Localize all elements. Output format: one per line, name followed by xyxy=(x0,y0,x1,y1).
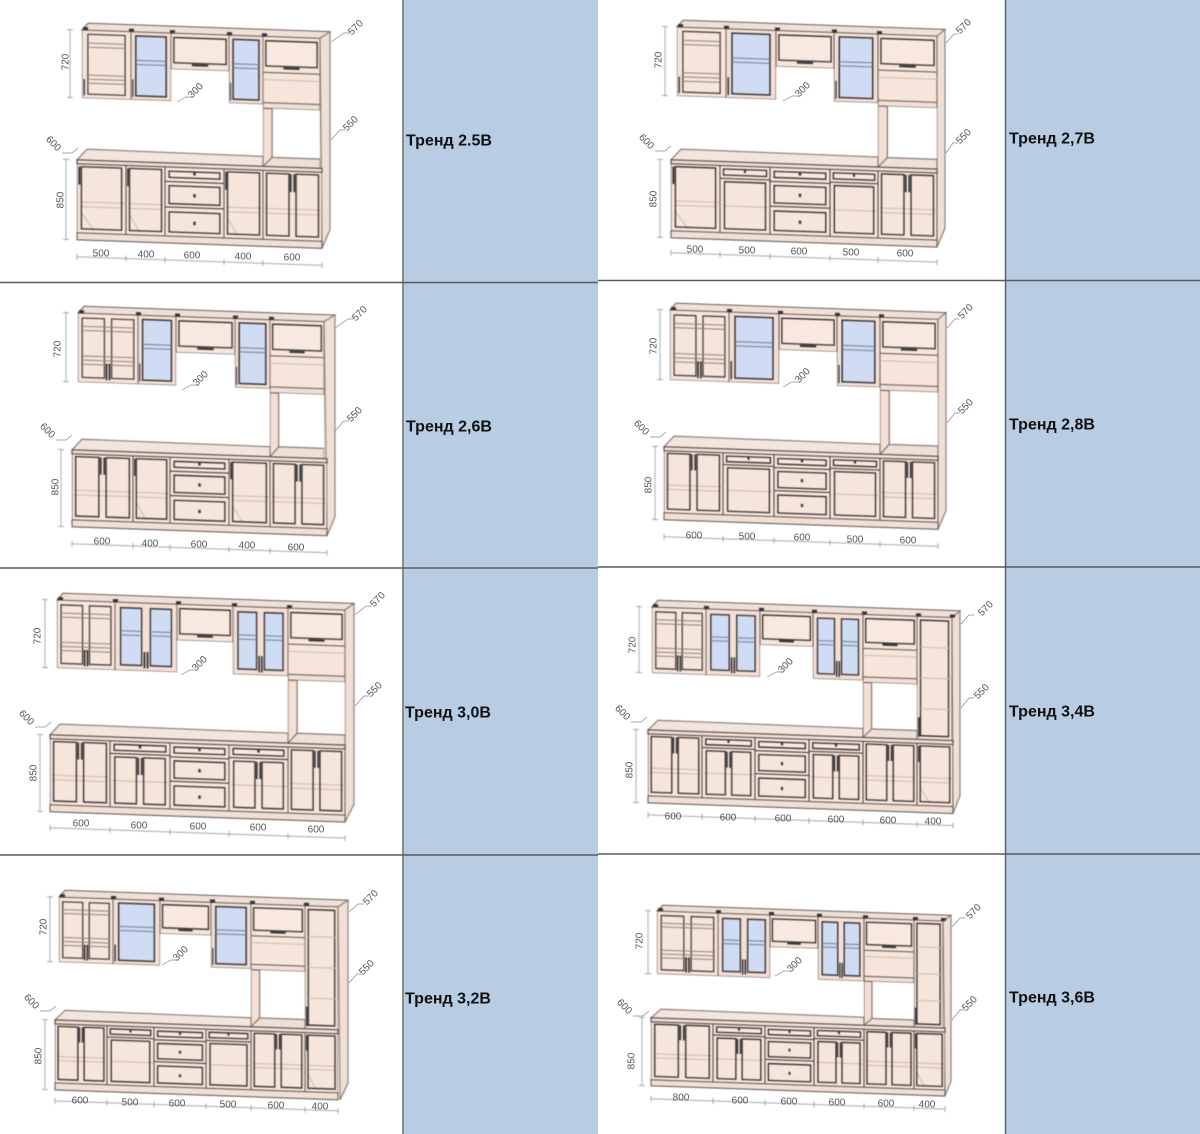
dimensions 3,2В: 850 xyxy=(34,1047,44,1064)
dimensions 3,6В: 720 xyxy=(634,932,646,949)
dimensions 2,6В: 600 xyxy=(288,542,305,554)
dimensions 3,6В: 600 xyxy=(829,1098,846,1108)
dimensions 2,6В: 400 xyxy=(239,540,256,552)
kitchen drawing 2,7В xyxy=(657,19,945,265)
dimensions 3,6В xyxy=(614,902,984,1110)
dimensions 2,6В: 600 xyxy=(191,540,208,550)
dimensions 2,8В: 600 xyxy=(794,532,811,544)
panel: Тренд 3,4В xyxy=(612,599,1095,829)
dimensions 2,8В: 600 xyxy=(900,536,917,546)
panel: Тренд 3,0В xyxy=(16,590,491,841)
panel: Тренд 3,6В xyxy=(614,902,1095,1112)
dimensions 3,2В: 720 xyxy=(38,918,50,935)
dimensions 2,7В: 300 xyxy=(793,80,813,100)
dimensions 3,4В: 600 xyxy=(775,814,792,824)
kitchen drawing 2.5В xyxy=(63,22,330,269)
dimensions 2,8В xyxy=(631,302,976,546)
dimensions 3,2В: 600 xyxy=(268,1100,285,1112)
dimensions 3,4В: 600 xyxy=(828,814,845,826)
kitchen drawing 2,8В xyxy=(652,302,946,550)
dimensions 3,4В: 570 xyxy=(976,599,996,619)
dimensions 2,8В: 550 xyxy=(956,397,976,417)
dimensions 2.5В: 550 xyxy=(341,114,361,134)
dimensions 3,2В: 400 xyxy=(312,1102,329,1112)
dimensions 2,6В: 300 xyxy=(191,369,211,389)
dimensions 3,2В: 550 xyxy=(357,958,377,978)
dimensions 2,8В: 500 xyxy=(847,534,864,546)
kitchen drawing 3,4В xyxy=(633,599,960,829)
dimensions 3,2В: 300 xyxy=(171,944,191,964)
dimensions 3,4В: 600 xyxy=(720,812,737,824)
dimensions 3,0В: 600 xyxy=(250,822,267,834)
label: Тренд 2.5В xyxy=(406,132,492,150)
dimensions 3,2В: 600 xyxy=(169,1098,186,1110)
dimensions 3,4В: 300 xyxy=(776,656,796,676)
dimensions 2.5В: 600 xyxy=(184,250,201,262)
dimensions 3,4В xyxy=(612,599,996,828)
dimensions 2,7В: 600 xyxy=(636,132,656,152)
dimensions 3,6В: 300 xyxy=(785,955,805,975)
dimensions 3,4В: 850 xyxy=(624,761,636,778)
dimensions 3,0В: 550 xyxy=(365,680,385,700)
label: Тренд 2,7В xyxy=(1009,130,1095,148)
dimensions 2,7В: 500 xyxy=(739,246,756,256)
dimensions 2,8В: 600 xyxy=(686,530,703,542)
dimensions 2.5В: 850 xyxy=(56,191,66,208)
panel: Тренд 2.5В xyxy=(43,18,492,269)
dimensions 2.5В: 600 xyxy=(284,252,301,264)
dimensions 3,4В: 600 xyxy=(665,812,682,822)
dimensions 3,4В: 600 xyxy=(612,703,632,723)
dimensions 3,0В: 600 xyxy=(308,824,325,836)
dimensions 2,6В: 600 xyxy=(94,536,111,548)
kitchen drawing 3,2В xyxy=(42,889,348,1114)
panel: Тренд 2,8В xyxy=(631,302,1095,550)
dimensions 2,7В: 600 xyxy=(791,246,808,258)
dimensions 2,6В xyxy=(37,304,370,554)
dimensions 2,7В: 850 xyxy=(648,190,660,207)
label: Тренд 3,6В xyxy=(1009,990,1095,1006)
dimensions 3,0В: 600 xyxy=(131,820,148,832)
dimensions 2,7В: 720 xyxy=(654,51,664,68)
dimensions 2.5В: 300 xyxy=(186,81,206,101)
dimensions 3,0В: 720 xyxy=(32,627,44,644)
dimensions 3,0В: 600 xyxy=(16,708,36,728)
dimensions 3,0В: 300 xyxy=(190,654,210,674)
dimensions 2.5В xyxy=(43,18,366,263)
dimensions 2.5В: 570 xyxy=(346,18,366,38)
kitchen drawing 2,6В xyxy=(58,305,335,556)
dimensions 2.5В: 600 xyxy=(43,134,63,154)
dimensions 3,2В: 600 xyxy=(21,992,41,1012)
label: Тренд 3,2В xyxy=(405,990,491,1008)
dimensions 2,7В: 570 xyxy=(954,17,974,37)
dimensions 3,0В: 600 xyxy=(190,822,207,832)
dimensions 2,6В: 850 xyxy=(50,478,62,495)
dimensions 3,0В: 570 xyxy=(368,590,388,610)
dimensions 3,2В xyxy=(21,888,381,1112)
dimensions 2,6В: 720 xyxy=(52,340,64,357)
dimensions 3,2В: 570 xyxy=(361,888,381,908)
dimensions 3,6В: 600 xyxy=(878,1098,895,1110)
dimensions 2,6В: 600 xyxy=(37,421,57,441)
dimensions 2.5В: 500 xyxy=(93,248,110,260)
dimensions 3,6В: 600 xyxy=(732,1096,749,1106)
blue label column right xyxy=(1006,0,1200,1134)
dimensions 2,8В: 850 xyxy=(644,476,654,493)
dimensions 2,6В: 570 xyxy=(350,304,370,324)
dimensions 2,8В: 570 xyxy=(956,302,976,322)
dimensions 3,6В: 400 xyxy=(919,1100,936,1110)
dimensions 2,7В: 550 xyxy=(954,127,974,147)
dimensions 2.5В: 400 xyxy=(235,252,252,262)
dimensions 2,8В: 300 xyxy=(793,366,813,386)
label: Тренд 2,8В xyxy=(1009,416,1095,434)
dimensions 2,7В xyxy=(636,17,974,259)
panel: Тренд 2,6В xyxy=(37,304,492,556)
dimensions 2,8В: 500 xyxy=(739,532,756,542)
dimensions 3,6В: 850 xyxy=(626,1052,638,1069)
dimensions 3,6В: 550 xyxy=(960,994,980,1014)
dimensions 2,6В: 550 xyxy=(345,405,365,425)
dimensions 3,6В: 600 xyxy=(781,1096,798,1108)
blue label column left xyxy=(404,0,598,1134)
dimensions 3,2В: 600 xyxy=(72,1096,89,1106)
dimensions 3,4В: 400 xyxy=(925,816,942,828)
kitchen drawing 3,0В xyxy=(37,592,354,841)
dimensions 3,4В: 720 xyxy=(628,636,638,653)
dimensions 3,2В: 500 xyxy=(122,1098,139,1108)
panel: Тренд 2,7В xyxy=(636,17,1095,265)
dimensions 3,4В: 550 xyxy=(972,682,992,702)
dimensions 2,7В: 500 xyxy=(843,248,860,258)
dimensions 2.5В: 720 xyxy=(60,53,72,70)
label: Тренд 3,4В xyxy=(1009,704,1095,720)
label: Тренд 2,6В xyxy=(406,418,492,436)
label: Тренд 3,0В xyxy=(405,704,491,722)
dimensions 3,4В: 600 xyxy=(880,816,897,826)
dimensions 3,0В xyxy=(16,590,388,836)
kitchen drawing 3,6В xyxy=(639,904,951,1112)
dimensions 2,7В: 500 xyxy=(687,244,704,256)
dimensions 3,0В: 600 xyxy=(73,818,90,830)
dimensions 2,8В: 720 xyxy=(648,337,660,354)
dimensions 2,6В: 400 xyxy=(142,538,159,550)
dimensions 2,8В: 600 xyxy=(631,418,651,438)
dimensions 3,6В: 600 xyxy=(614,997,634,1017)
dimensions 2.5В: 400 xyxy=(138,250,155,260)
dimensions 3,0В: 850 xyxy=(28,764,40,781)
dimensions 3,2В: 500 xyxy=(220,1100,237,1110)
dimensions 3,6В: 800 xyxy=(673,1092,690,1104)
panel: Тренд 3,2В xyxy=(21,888,491,1114)
dimensions 2,7В: 600 xyxy=(897,248,914,260)
dimensions 3,6В: 570 xyxy=(964,902,984,922)
